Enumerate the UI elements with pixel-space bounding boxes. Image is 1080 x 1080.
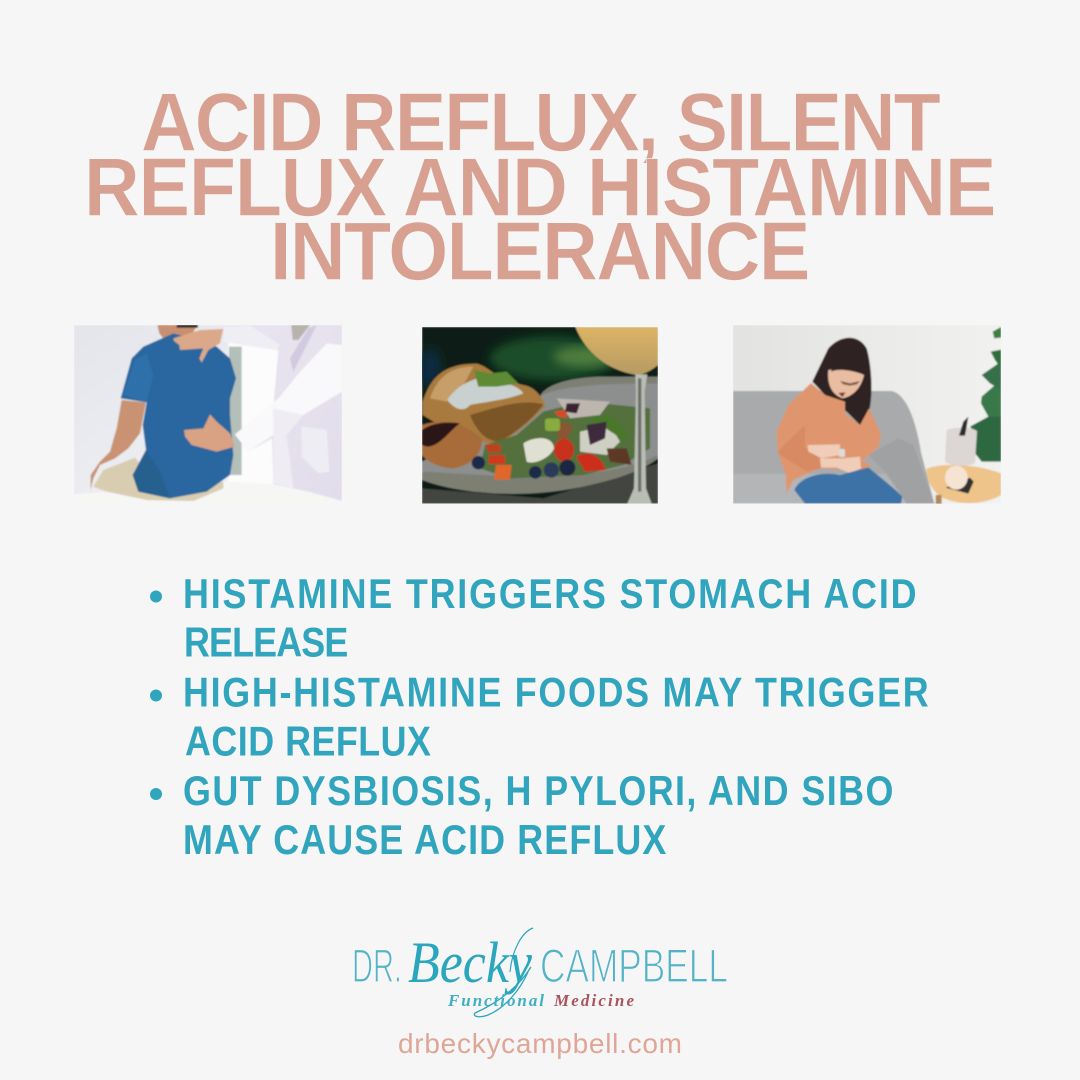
bullet 3	[150, 769, 893, 864]
logo: Dr. Becky Campbell Functional Medicine: Medicine	[553, 991, 634, 1010]
logo: Dr. Becky Campbell Functional Medicine: CAMPBELL	[540, 939, 728, 992]
head	[157, 325, 197, 338]
photo: woman on sofa holding her stomach	[733, 325, 1001, 505]
photo: doctor examining patient's back	[74, 325, 342, 505]
title: REFLUX AND HISTAMINE	[84, 140, 996, 233]
logo: Dr. Becky Campbell Functional Medicine	[352, 928, 728, 1017]
sofa	[733, 391, 934, 504]
bullet 1: HISTAMINE TRIGGERS STOMACH ACID	[183, 572, 917, 618]
table and plate	[422, 463, 658, 504]
plant	[970, 415, 1001, 462]
potato	[423, 364, 545, 443]
bullet 3: MAY CAUSE ACID REFLUX	[183, 818, 666, 864]
logo: Dr. Becky Campbell Functional Medicine: DR.	[352, 939, 402, 992]
wine glass	[575, 327, 658, 375]
hands	[808, 444, 840, 458]
bullet 1: RELEASE	[184, 620, 348, 666]
shirt	[121, 333, 236, 498]
hair back	[812, 338, 871, 425]
chicken	[422, 422, 482, 468]
doctor coat	[220, 325, 342, 501]
logo: Dr. Becky Campbell Functional Medicine: Functional	[447, 991, 544, 1010]
title: INTOLERANCE	[270, 204, 810, 297]
bullet 3: GUT DYSBIOSIS, H PYLORI, AND SIBO	[183, 769, 893, 815]
bullet list	[150, 572, 929, 864]
shorts and arm	[93, 458, 223, 501]
sweater	[777, 383, 881, 493]
title	[84, 75, 996, 297]
bullet 2: HIGH-HISTAMINE FOODS MAY TRIGGER	[183, 670, 929, 716]
bullet 2: ACID REFLUX	[185, 719, 431, 765]
side table and lamp	[926, 465, 1001, 503]
bullet 2	[150, 670, 929, 765]
hands	[173, 329, 223, 363]
bullet 1	[150, 572, 917, 666]
website url: drbeckycampbell.com	[398, 1028, 682, 1059]
salad	[480, 402, 650, 478]
face	[828, 369, 864, 398]
jeans	[794, 467, 902, 504]
photo: plated food with wine glass	[418, 327, 658, 504]
logo: Dr. Becky Campbell Functional Medicine: Becky	[408, 930, 532, 995]
title: ACID REFLUX, SILENT	[141, 75, 941, 168]
